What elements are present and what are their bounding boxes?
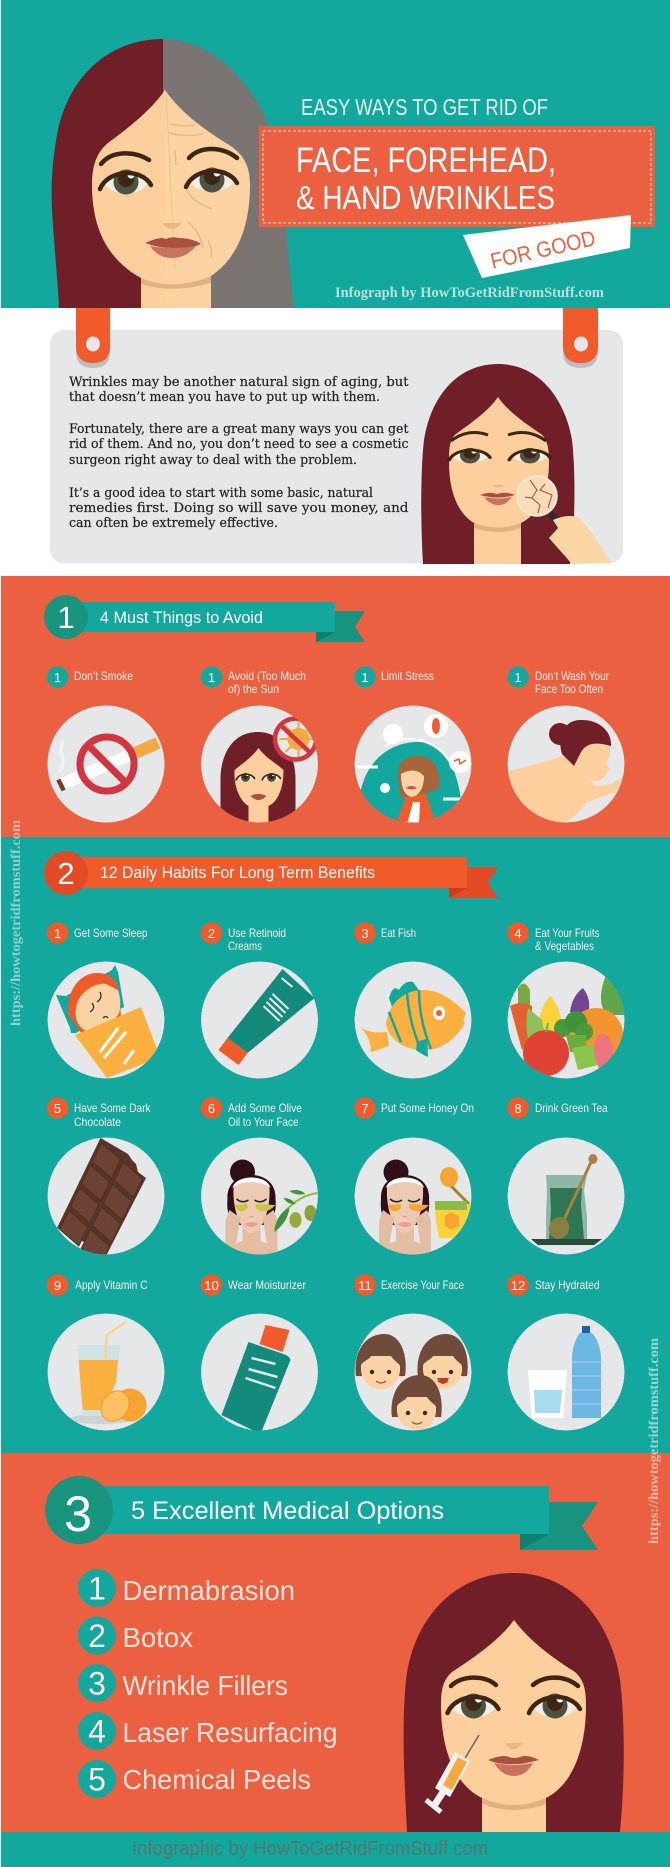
item 6: olive oil: [201, 1097, 318, 1255]
credit line: Infograph by HowToGetRidFromStuff.com: [335, 285, 604, 301]
item: limit stress: Limit Stress: [381, 669, 434, 683]
title banner: & HAND WRINKLES: [296, 179, 555, 216]
icon: cream tube: [201, 962, 318, 1078]
for good tag: [463, 215, 631, 278]
intro text: It’s a good idea to start with some basic, natural: [69, 486, 373, 501]
item 11: exercise: [354, 1274, 472, 1430]
item 3: fish: [354, 922, 472, 1078]
illustration: woman with syringe: [404, 1573, 624, 1832]
section 2 panel: daily habits: [1, 819, 670, 1453]
list of medical options: 1: [88, 1570, 106, 1606]
section 1 panel: things to avoid: [1, 576, 670, 837]
item 5: chocolate: Have Some Dark: [74, 1101, 151, 1115]
section 3 heading ribbon: 5 Excellent Medical Options: [131, 1497, 444, 1525]
item: don't smoke: Don’t Smoke: [74, 669, 133, 683]
item 1: sleep: [47, 922, 164, 1078]
section 2 heading ribbon: [44, 851, 498, 898]
icon: tea glass: [508, 1138, 624, 1254]
intro text: that doesn’t mean you have to put up with them.: [69, 390, 380, 405]
list of medical options: 3: [88, 1666, 106, 1702]
header panel: [1, 0, 670, 308]
icon: woman and crossed sun: [201, 706, 318, 824]
item 2: retinoid: Use Retinoid: [228, 926, 286, 940]
item 12: hydrated: [507, 1274, 624, 1430]
item 12: hydrated: Stay Hydrated: [535, 1278, 600, 1292]
item 6: olive oil: Oil to Your Face: [228, 1115, 299, 1129]
icon: fish: [354, 962, 472, 1078]
item 7: honey: Put Some Honey On: [381, 1101, 474, 1115]
item: don't wash too often: Don’t Wash Your: [535, 669, 609, 683]
item 3: fish: 3: [361, 926, 369, 941]
icon: no smoking: [48, 706, 164, 822]
item: avoid the sun: of) the Sun: [228, 682, 279, 696]
list of medical options: Botox: [122, 1622, 193, 1653]
item: limit stress: [354, 666, 472, 824]
item 4: fruits: Eat Your Fruits: [535, 926, 600, 940]
item: avoid the sun: [201, 666, 318, 824]
icon: three faces: [354, 1314, 472, 1430]
item: don't wash too often: Face Too Often: [535, 682, 603, 696]
icon: moisturizer bottle: [201, 1314, 318, 1434]
item 9: vitamin c: [47, 1274, 164, 1430]
icon: orange juice: [48, 1314, 164, 1430]
item 4: fruits: [507, 922, 624, 1078]
item 1: sleep: 1: [54, 926, 61, 941]
item 5: chocolate: Chocolate: [74, 1115, 121, 1129]
for good tag: FOR GOOD: [488, 225, 598, 274]
icon: fruits and vegetables: [508, 962, 624, 1078]
right tab: [563, 308, 598, 368]
section 3 heading ribbon: [45, 1476, 598, 1550]
left vertical watermark: https://howtogetridfromstuff.com: [8, 819, 23, 1026]
item 10: moisturizer: [201, 1274, 318, 1434]
illustration: woman with magnifier: [421, 364, 611, 564]
right vertical watermark: https://howtogetridfromstuff.com: [646, 1337, 661, 1544]
section 1 heading ribbon: 1: [57, 600, 75, 635]
list of medical options: 4: [88, 1714, 106, 1750]
item: avoid the sun: 1: [208, 670, 215, 685]
intro text: Fortunately, there are a great many ways you can get: [69, 422, 409, 437]
item: don't wash too often: [506, 666, 624, 824]
list of medical options: Chemical Peels: [122, 1764, 311, 1795]
icon: water: [508, 1314, 624, 1430]
section 2 heading ribbon: 12 Daily Habits For Long Term Benefits: [100, 864, 375, 882]
section 3 panel: medical options: [1, 1337, 670, 1832]
icon: olive mask: [201, 1138, 318, 1255]
item 10: moisturizer: 10: [204, 1278, 219, 1293]
title banner: FACE, FOREHEAD,: [296, 141, 556, 180]
list of medical options: [78, 1569, 338, 1798]
intro text: can often be extremely effective.: [69, 516, 278, 531]
item: don't wash too often: 1: [514, 670, 522, 685]
intro text: remedies first. Doing so will save you money, and: [69, 501, 408, 516]
item 3: fish: Eat Fish: [381, 926, 416, 940]
item 11: exercise: Exercise Your Face: [381, 1278, 464, 1292]
item 8: green tea: [507, 1097, 624, 1254]
item 9: vitamin c: 9: [54, 1278, 61, 1293]
footer credit: Infographic by HowToGetRidFromStuff.com: [132, 1838, 488, 1860]
section 1 heading ribbon: [44, 595, 365, 642]
icon: syringe: [426, 1735, 479, 1812]
footer panel: [1, 1832, 670, 1867]
icon: stressed woman: [354, 706, 472, 824]
item: limit stress: 1: [361, 670, 369, 685]
item 9: vitamin c: Apply Vitamin C: [75, 1278, 148, 1292]
left tab: [76, 308, 110, 368]
item: don't smoke: 1: [54, 670, 61, 685]
item 5: chocolate: 5: [54, 1101, 61, 1116]
intro text: surgeon right away to deal with the problem.: [69, 453, 357, 468]
section 3 heading ribbon: 3: [64, 1486, 92, 1542]
intro text: [69, 375, 409, 531]
item 2: retinoid: Creams: [228, 939, 262, 953]
item 1: sleep: Get Some Sleep: [74, 926, 148, 940]
intro card: [50, 308, 623, 564]
icon: honey mask: [354, 1138, 472, 1255]
icon: sleeping girl: [48, 962, 164, 1078]
icon: woman washing face: [506, 706, 624, 824]
section 1 heading ribbon: 4 Must Things to Avoid: [100, 608, 263, 627]
list of medical options: Dermabrasion: [122, 1575, 295, 1606]
icon: chocolate bar: [48, 1138, 164, 1265]
intro text: Wrinkles may be another natural sign of aging, but: [69, 375, 409, 390]
list of medical options: Wrinkle Fillers: [122, 1670, 288, 1701]
intro text: rid of them. And no, you don’t need to see a cosmetic: [69, 437, 408, 452]
item 10: moisturizer: Wear Moisturizer: [228, 1278, 306, 1292]
item 11: exercise: 11: [358, 1278, 372, 1293]
item 4: fruits: & Vegetables: [535, 939, 594, 953]
item 2: retinoid: [201, 922, 318, 1078]
section 2 heading ribbon: 2: [57, 856, 75, 891]
item 8: green tea: 8: [514, 1101, 522, 1116]
item 8: green tea: Drink Green Tea: [535, 1101, 608, 1115]
illustration: half young half old woman: [52, 39, 294, 308]
list of medical options: Laser Resurfacing: [122, 1717, 338, 1748]
title line: EASY WAYS TO GET RID OF: [301, 94, 548, 120]
item 12: hydrated: 12: [511, 1278, 525, 1293]
item: don't smoke: [47, 666, 164, 822]
list of medical options: 5: [88, 1762, 106, 1798]
title banner: [259, 126, 655, 227]
item 6: olive oil: Add Some Olive: [228, 1101, 302, 1115]
item 6: olive oil: 6: [208, 1101, 215, 1116]
item 5: chocolate: [47, 1097, 164, 1265]
item 4: fruits: 4: [514, 926, 522, 941]
list of medical options: 2: [88, 1618, 106, 1654]
item 7: honey: [354, 1097, 474, 1255]
item: avoid the sun: Avoid (Too Much: [228, 669, 306, 683]
item 7: honey: 7: [361, 1101, 369, 1116]
item 2: retinoid: 2: [208, 926, 215, 941]
